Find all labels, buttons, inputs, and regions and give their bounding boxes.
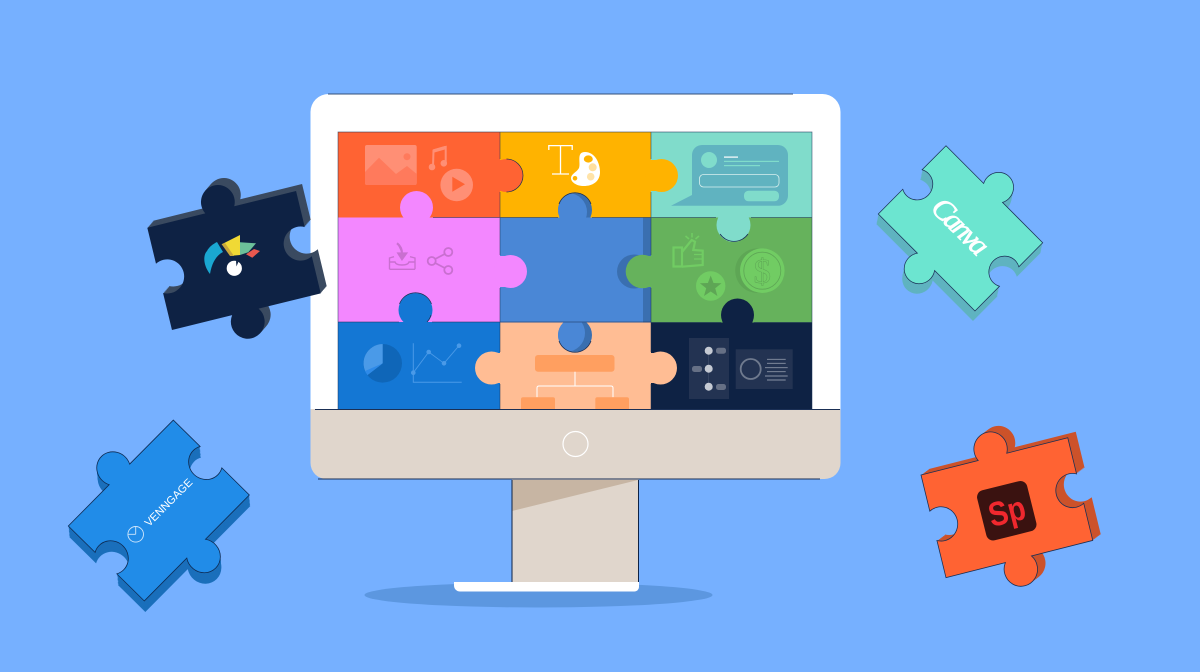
- org chart: [521, 355, 629, 409]
- piece side: [50, 404, 270, 631]
- piece face: [141, 167, 327, 356]
- screen puzzle: [338, 132, 812, 409]
- puzzle tile: peach org chart: [500, 314, 651, 409]
- Spark logo: [976, 480, 1038, 542]
- icon: music note: [429, 147, 447, 170]
- screen outline: [338, 132, 812, 409]
- icon: share nodes: [428, 248, 452, 274]
- icon: star badge: [696, 271, 725, 301]
- icon: dollar coin: [735, 248, 785, 293]
- puzzle tile: dark blue charts: [338, 293, 508, 409]
- puzzle tile: yellow typography: [490, 132, 651, 218]
- piece side: [916, 407, 1107, 603]
- icon: thumbs up: [674, 233, 703, 267]
- piece side: [142, 160, 333, 355]
- Venngage wordmark: VENNGAGE: [143, 477, 195, 529]
- gauge logo: [204, 235, 260, 276]
- icon: dollar coin: $: [754, 252, 771, 291]
- tab up into yellow tile: [558, 192, 592, 218]
- tab of blue piece down: [558, 322, 592, 353]
- icon: letter T: [549, 146, 572, 174]
- monitor foot: [454, 582, 639, 592]
- piece face: [861, 129, 1059, 329]
- teal tab down: [716, 208, 750, 242]
- monitor beige base: [310, 409, 840, 479]
- piece face: [50, 402, 269, 620]
- puzzle tile: orange media: [338, 132, 500, 218]
- puzzle piece: Canva: [859, 129, 1059, 339]
- icon: image: [365, 145, 417, 185]
- gauge panel: [736, 349, 793, 389]
- puzzle tile: green finance: [617, 208, 812, 322]
- puzzle tile: navy dashboard: [644, 298, 812, 409]
- Spark logo: Sp: [984, 489, 1030, 535]
- home button: [563, 432, 588, 456]
- puzzle piece: navy gauge logo: [141, 160, 333, 356]
- puzzle piece: Adobe Spark: [915, 407, 1107, 604]
- icon: play button: [440, 169, 473, 201]
- Venngage logo icon: [128, 526, 144, 542]
- piece side: [859, 131, 1059, 339]
- flow panel: [689, 338, 729, 399]
- piece face: [915, 413, 1099, 604]
- icon: inbox download: [390, 243, 415, 269]
- monitor stand: [512, 479, 638, 583]
- pie chart: [363, 344, 402, 383]
- monitor stand shadow: [364, 582, 712, 608]
- puzzle tile: blue centre piece: [500, 193, 651, 322]
- puzzle piece: Venngage: [50, 402, 270, 631]
- monitor white bezel: [310, 94, 840, 411]
- Canva wordmark: Canva: [925, 191, 996, 262]
- icon: chat bubble form: [671, 145, 788, 206]
- monitor: [310, 94, 840, 592]
- icon: paint palette: [571, 152, 600, 186]
- line chart: [411, 343, 462, 382]
- puzzle tile: pink sharing: [338, 191, 527, 322]
- puzzle tile: teal chat form: [645, 132, 812, 218]
